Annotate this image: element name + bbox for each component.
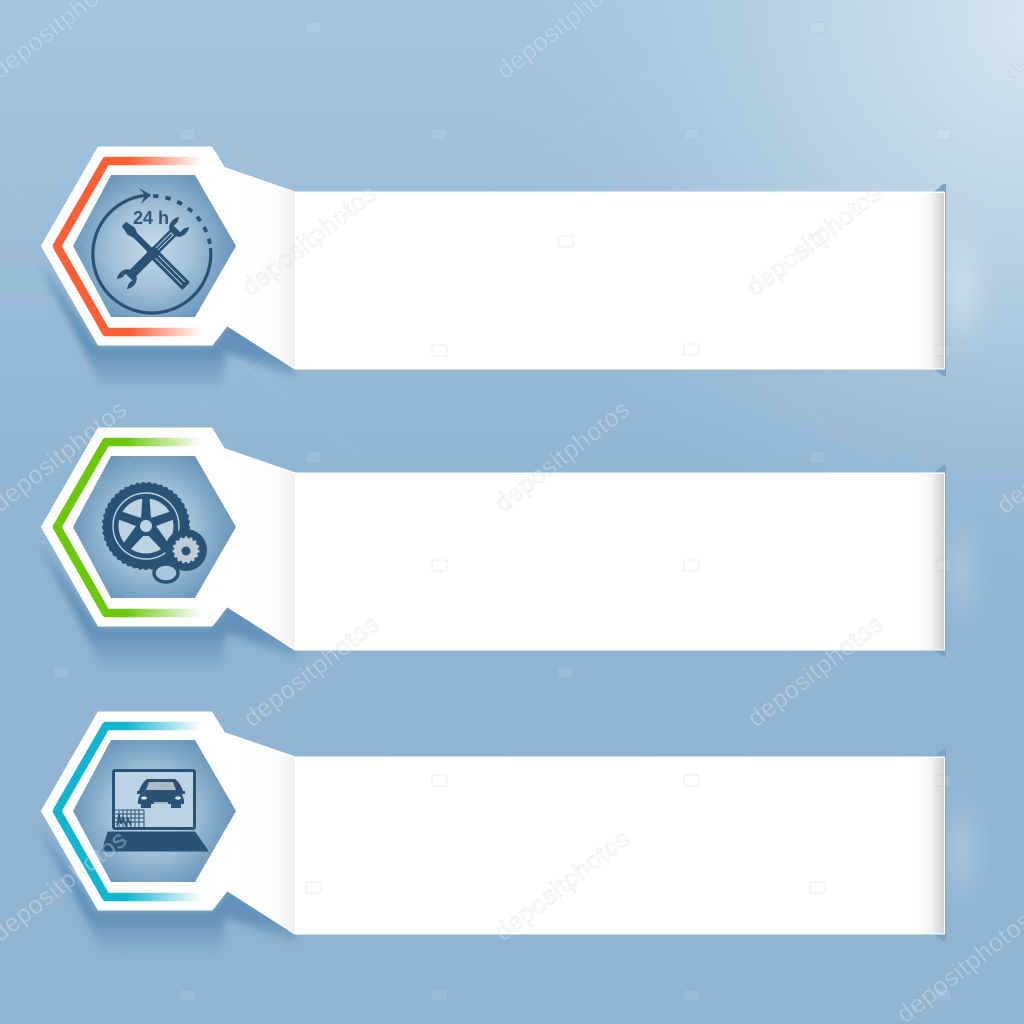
banner 2 white strip	[42, 428, 944, 650]
banner 3 right end shade	[918, 758, 944, 934]
banner 1 white strip	[42, 148, 944, 368]
watermark: depositphotos	[489, 395, 636, 518]
watermark: depositphotos	[489, 824, 636, 947]
banner 1	[39, 148, 946, 386]
banner 1 hexagon	[73, 175, 236, 317]
banner 3 shadow	[39, 827, 296, 951]
banner 1 fold	[235, 171, 295, 368]
label: 24 h: 24 h	[133, 208, 169, 228]
icon: laptop with car	[102, 770, 208, 851]
icon: 24 hour tools	[93, 188, 211, 313]
banner 3 slit	[294, 749, 946, 941]
watermark: depositphotos	[742, 610, 889, 733]
banner 1 slit	[294, 184, 946, 376]
banner 2 coloured stripe	[57, 442, 202, 613]
watermark: depositphotos	[238, 610, 385, 733]
banner 2 right end shade	[918, 474, 944, 650]
icon: wheel and gear	[103, 483, 207, 582]
screwdriver	[120, 220, 190, 290]
banner 2 fold	[235, 452, 295, 650]
watermark: depositphotos	[741, 179, 888, 302]
banner 2 hexagon	[73, 456, 236, 598]
banner 1 shadow	[39, 262, 296, 386]
banner 3 coloured stripe	[57, 726, 202, 897]
banner 2 slit	[294, 465, 946, 657]
watermark: depositphotos	[236, 179, 383, 302]
banner 2	[39, 428, 946, 667]
banner 3	[39, 712, 946, 951]
banner 2 shadow	[39, 543, 296, 667]
banner 3 fold	[235, 736, 295, 934]
wrench	[115, 215, 191, 291]
banner 3 hexagon	[73, 740, 236, 882]
banner 3 white strip	[42, 712, 944, 934]
banner 1 right end shade	[918, 193, 944, 368]
banner 1 coloured stripe	[57, 161, 202, 332]
